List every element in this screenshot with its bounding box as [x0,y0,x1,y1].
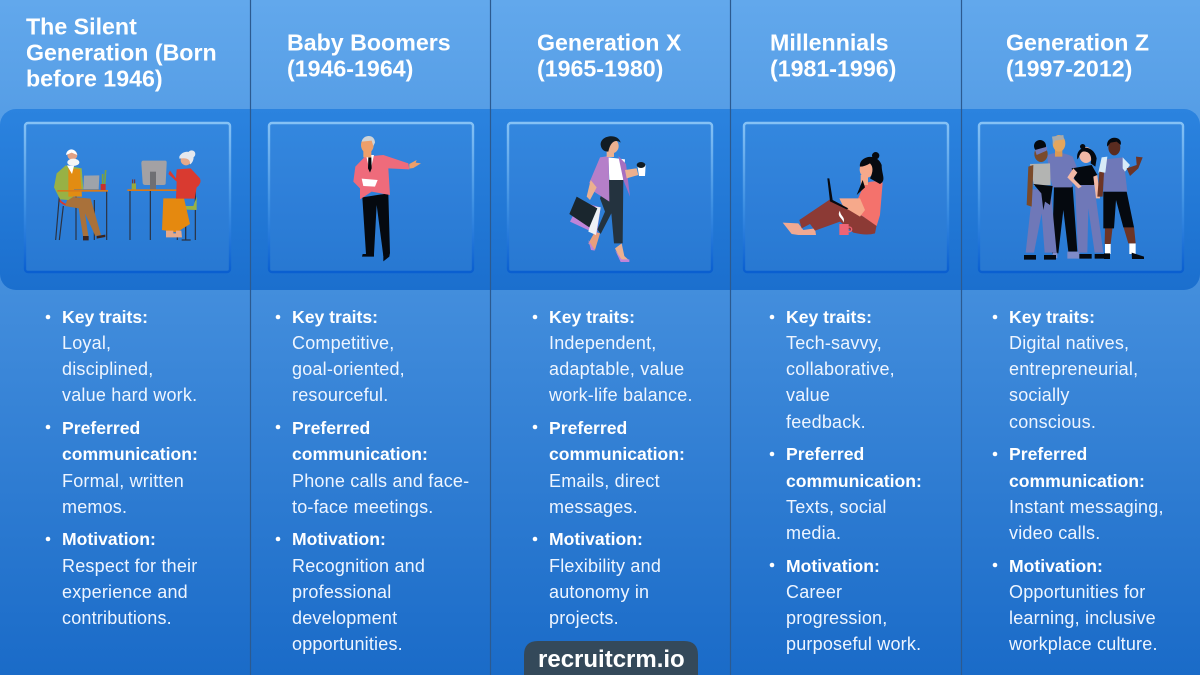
text: baby boomers details: resourceful. [292,385,388,405]
heading: Generation X: (1965-1980) [537,56,663,82]
panel: Generation Z [979,30,1183,654]
heading: The Silent Generation: The Silent [26,14,137,40]
text: millennials details: media. [786,523,841,543]
text: silent generation details: experience and [62,582,188,602]
text: silent generation details: Loyal, [62,333,111,353]
text: silent generation details: Key traits: [62,307,148,327]
footer badge: recruitcrm.io [524,641,698,675]
heading: The Silent Generation: Generation (Born [26,40,217,66]
text: silent generation details: Preferred [62,418,140,438]
text: generation z details: socially [1009,385,1070,405]
panel: The Silent Generation [25,14,230,628]
text: generation x details: projects. [549,608,619,628]
text: millennials details: collaborative, [786,359,895,379]
text: millennials details: progression, [786,608,887,628]
text: baby boomers details: opportunities. [292,634,403,654]
heading: Millennials: Millennials [770,30,889,56]
image frame: silent generation [25,123,230,272]
text: baby boomers details: professional [292,582,391,602]
heading: Millennials: (1981-1996) [770,56,896,82]
text: generation x details: Motivation: [549,529,643,549]
text: silent generation details: disciplined, [62,359,153,379]
text: generation z details: conscious. [1009,412,1096,432]
text: generation x details: autonomy in [549,582,649,602]
text: generation z details: Key traits: [1009,307,1095,327]
text: baby boomers details: Motivation: [292,529,386,549]
text: generation z details [993,307,1164,654]
text: generation x details: adaptable, value [549,359,684,379]
text: generation z details: Opportunities for [1009,582,1145,602]
heading: Generation Z: Generation Z [1006,30,1149,56]
heading: Generation Z: (1997-2012) [1006,56,1132,82]
text: millennials details: communication: [786,471,922,491]
icon: man in pink jacket presenting [353,136,421,261]
text: generation x details: Independent, [549,333,656,353]
text: silent generation details: Formal, written [62,471,184,491]
text: baby boomers details [276,307,469,654]
text: millennials details: Tech-savvy, [786,333,882,353]
text: baby boomers details: goal-oriented, [292,359,405,379]
panel: Generation X [508,30,712,628]
text: generation z details: Preferred [1009,444,1087,464]
text: generation x details: Flexibility and [549,556,661,576]
text: baby boomers details: to-face meetings. [292,497,433,517]
heading: Generation X: Generation X [537,30,682,56]
image band [0,109,1200,290]
text: generation z details: Digital natives, [1009,333,1129,353]
panel: Millennials [744,30,948,654]
text: generation x details [533,307,693,628]
text: baby boomers details: Competitive, [292,333,394,353]
image frame: baby boomers [269,123,473,272]
text: baby boomers details: Recognition and [292,556,425,576]
text: silent generation details: Motivation: [62,529,156,549]
text: generation z details: workplace culture. [1008,634,1158,654]
text: generation x details: messages. [549,497,638,517]
text: silent generation details: contributions. [62,608,172,628]
text: generation x details: Key traits: [549,307,635,327]
text: millennials details: Motivation: [786,556,880,576]
icon: group of four young people [1024,135,1144,260]
text: generation x details: Preferred [549,418,627,438]
text: baby boomers details: Preferred [292,418,370,438]
text: millennials details: value [786,385,830,405]
text: silent generation details: value hard work. [62,385,197,405]
image frame: generation x [508,123,712,272]
text: silent generation details [46,307,198,628]
heading: Baby Boomers: (1946-1964) [287,56,413,82]
image frame: generation z [979,123,1183,272]
text: generation z details: Instant messaging, [1009,497,1164,517]
panel: Baby Boomers [269,30,473,654]
text: generation x details: work-life balance. [548,385,693,405]
text: millennials details: Career [786,582,842,602]
text: silent generation details: communication: [62,444,198,464]
heading: Baby Boomers: Baby Boomers [287,30,451,56]
text: millennials details: purposeful work. [786,634,921,654]
text: generation z details: learning, inclusive [1009,608,1156,628]
text: generation z details: Motivation: [1009,556,1103,576]
icon: woman walking with briefcase and coffee [569,136,646,262]
text: generation z details: communication: [1009,471,1145,491]
text: generation z details: video calls. [1009,523,1100,543]
footer badge: recruitcrm.io: recruitcrm.io [538,646,685,673]
text: millennials details: Texts, social [786,497,887,517]
heading: The Silent Generation: before 1946) [26,66,163,92]
text: silent generation details: memos. [62,497,127,517]
text: millennials details [770,307,922,654]
icon: older man and woman at desks [54,149,201,240]
text: generation x details: communication: [549,444,685,464]
text: baby boomers details: communication: [292,444,428,464]
text: baby boomers details: development [292,608,397,628]
text: baby boomers details: Phone calls and face- [292,471,469,491]
image frame: millennials [744,123,948,272]
text: millennials details: Key traits: [786,307,872,327]
text: generation z details: entrepreneurial, [1009,359,1138,379]
text: generation x details: Emails, direct [549,471,660,491]
text: millennials details: Preferred [786,444,864,464]
text: baby boomers details: Key traits: [292,307,378,327]
text: millennials details: feedback. [786,412,866,432]
icon: woman sitting with laptop and mug [783,152,883,235]
text: silent generation details: Respect for their [62,556,197,576]
